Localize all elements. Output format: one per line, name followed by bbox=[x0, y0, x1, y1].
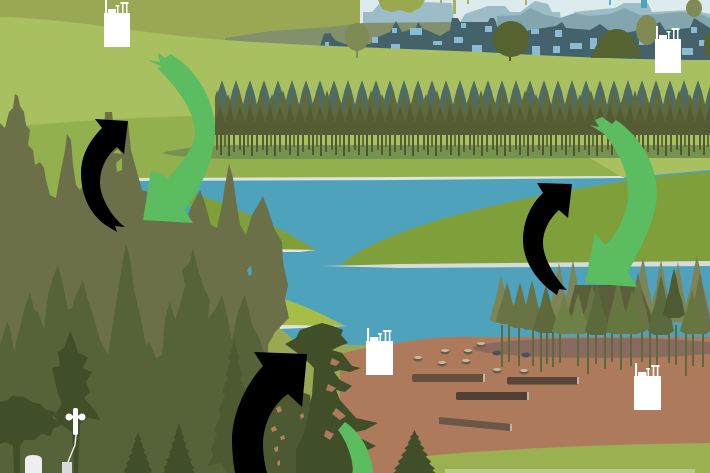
tree behind houses: olive bbox=[378, 0, 425, 13]
small peninsula shore bbox=[280, 325, 348, 329]
anemometer bbox=[66, 408, 86, 435]
clearing small spruce bbox=[392, 430, 437, 473]
mast cable bbox=[68, 435, 76, 462]
brown gaps inside pine branches bbox=[324, 358, 346, 440]
faded distant houses bbox=[363, 1, 710, 40]
green arrow: top left bbox=[143, 53, 215, 223]
olive hill band bbox=[225, 22, 470, 60]
black arrow: right bbox=[523, 183, 572, 295]
black arrow: top left bbox=[81, 119, 128, 232]
tree cluster middle layer bbox=[496, 272, 710, 334]
foreground forest: mid silhouette bbox=[0, 243, 270, 473]
foreground forest: olive silhouette bbox=[0, 94, 289, 473]
tall dark spruce bbox=[52, 331, 100, 473]
sky bbox=[360, 0, 710, 30]
right light meadow bbox=[590, 158, 710, 177]
cylinder gauge bbox=[25, 455, 42, 473]
sensor tower: clearing bbox=[366, 328, 393, 375]
foreground scots pine bbox=[285, 323, 378, 473]
small light peninsula bbox=[280, 298, 345, 326]
north shore line bbox=[135, 176, 625, 181]
mid spruce behind arrow bbox=[208, 337, 260, 473]
left peninsula bbox=[190, 192, 316, 250]
felled logs bbox=[412, 374, 579, 431]
island shore bbox=[322, 261, 710, 268]
front row of houses bbox=[320, 18, 710, 62]
weather station bbox=[25, 408, 86, 473]
tree cluster back layer bbox=[490, 255, 710, 323]
green arrow: right bbox=[585, 117, 657, 287]
right island bbox=[340, 172, 710, 265]
tree cluster front layer bbox=[533, 268, 704, 335]
black arrow: bottom bbox=[232, 352, 307, 473]
meadow path bbox=[445, 469, 695, 473]
pale gaps in olive canopy bbox=[113, 149, 252, 276]
small spruce b bbox=[162, 423, 196, 473]
hanging drips at top edge bbox=[440, 0, 647, 14]
sensor tower: top right bbox=[655, 26, 681, 73]
sensor tower: top left bbox=[104, 0, 130, 47]
light green hill bbox=[0, 17, 710, 180]
small spruce a bbox=[122, 432, 154, 473]
tree cluster trunks bbox=[501, 325, 704, 376]
ground shadow under cluster bbox=[473, 338, 710, 358]
mid green terrace bbox=[0, 116, 710, 240]
brown clearing bbox=[340, 337, 710, 473]
logger box bbox=[62, 462, 72, 473]
dark ground tree behind bottom arrow bbox=[258, 370, 320, 473]
tree line ground shadow bbox=[162, 145, 710, 159]
sensor tower: behind cluster bbox=[634, 363, 661, 410]
conifer tree line bbox=[215, 80, 710, 157]
left broad pine bbox=[0, 396, 64, 473]
foreground dark trees bbox=[0, 331, 437, 473]
house-line trees bbox=[345, 0, 710, 61]
peninsula shore bbox=[270, 249, 316, 252]
brown gap flecks behind pine bbox=[271, 406, 304, 466]
bottom meadow bbox=[410, 443, 710, 473]
stumps bbox=[414, 342, 530, 374]
lake bbox=[130, 170, 710, 345]
tree cluster dark backing bbox=[565, 285, 655, 325]
green arrow: bottom bbox=[338, 422, 373, 473]
